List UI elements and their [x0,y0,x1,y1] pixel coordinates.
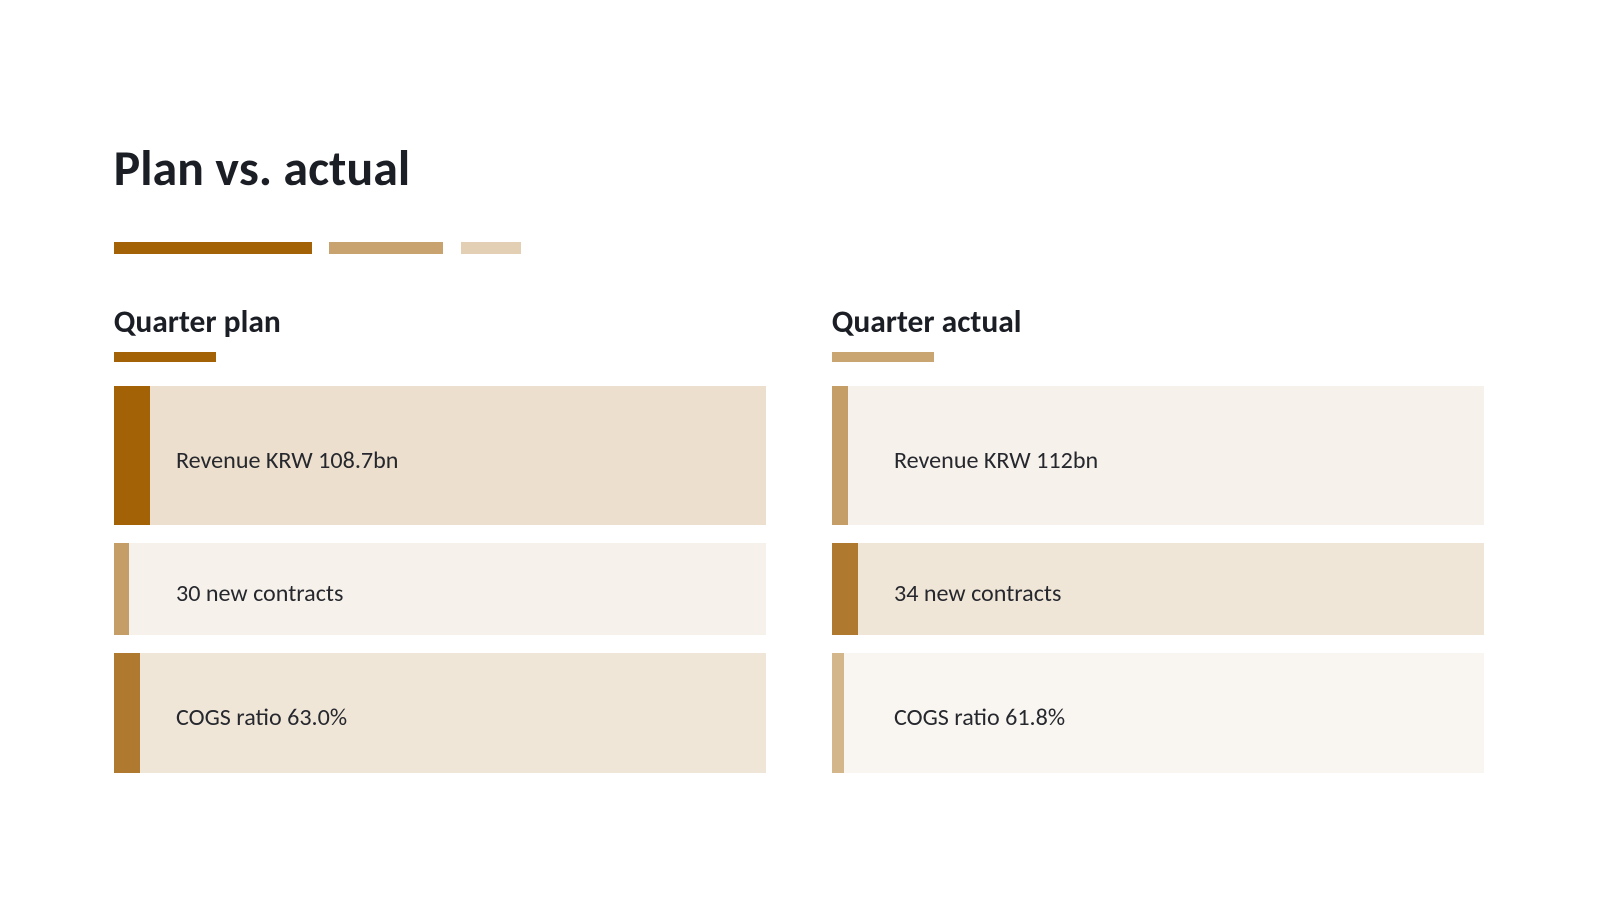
text: COGS ratio 63.0% [176,703,347,732]
marker [832,653,844,773]
row: revenue plan [114,386,766,525]
text: 34 new contracts [894,579,1061,608]
heading: quarter plan: Quarter plan [114,303,281,341]
row: revenue actual [832,386,1484,525]
panel: quarter plan [114,303,766,773]
heading underline: quarter plan [114,352,216,362]
row: cogs plan [114,653,766,773]
marker [832,543,858,635]
marker [114,653,140,773]
text: Revenue KRW 108.7bn [176,446,398,475]
row: contracts plan [114,543,766,635]
heading underline: quarter actual [832,352,934,362]
heading: quarter actual: Quarter actual [832,303,1022,341]
row: cogs actual [832,653,1484,773]
row: contracts actual [832,543,1484,635]
title: Plan vs. actual [114,138,410,199]
text: COGS ratio 61.8% [894,703,1065,732]
text: 30 new contracts [176,579,343,608]
marker [114,386,150,525]
text: Revenue KRW 112bn [894,446,1098,475]
marker [114,543,129,635]
marker [832,386,848,525]
legend accent bars [114,242,521,254]
panel: quarter actual [832,303,1484,773]
